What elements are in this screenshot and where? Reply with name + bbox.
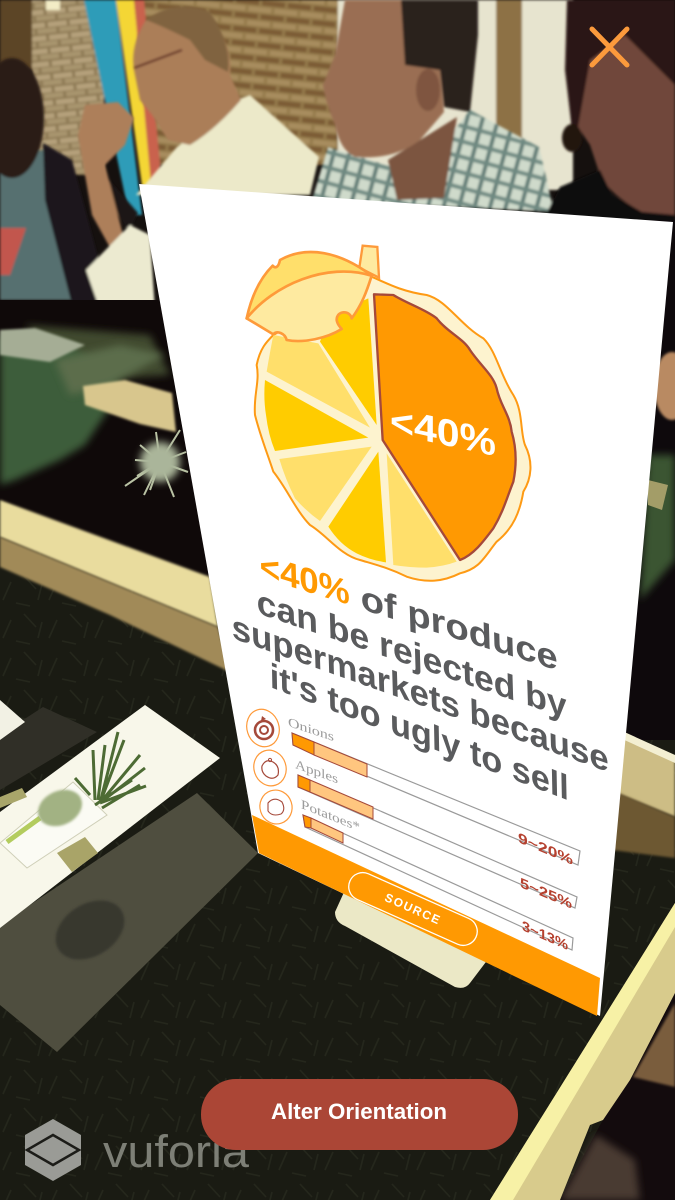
icon: potato <box>256 786 296 828</box>
row: potatoes: Potatoes* <box>301 796 360 835</box>
right side of the scene <box>600 220 675 858</box>
panel: tilted infographic card <box>139 184 673 1016</box>
row: onions: Onions <box>288 714 334 744</box>
row: apples: Apples <box>295 756 338 786</box>
icon: vuforia hexagon <box>25 1119 81 1181</box>
alter orientation button: Alter Orientation <box>271 1099 447 1124</box>
vuforia logo <box>25 1119 250 1181</box>
heading <box>231 546 609 808</box>
source button <box>344 868 482 950</box>
highlighted segment <box>374 294 516 560</box>
row: apples <box>295 756 577 913</box>
heading: can be rejected by <box>256 581 567 726</box>
heading: supermarkets because <box>231 606 609 780</box>
heading: of produce <box>360 578 558 678</box>
row: apples: 5~25% <box>520 875 572 913</box>
vuforia logo: vuforia <box>103 1126 250 1177</box>
heading: it's too ugly to sell <box>269 655 569 808</box>
orange footer band <box>252 815 600 1016</box>
alter orientation button <box>201 1079 518 1150</box>
heading: <40% <box>259 546 350 613</box>
stand under the card <box>335 890 495 988</box>
row: potatoes: 3~13% <box>522 919 568 954</box>
upper dark backdrop <box>0 0 675 335</box>
front leaf <box>247 272 372 341</box>
left plants and soil <box>0 300 230 672</box>
fruit stem <box>359 246 379 278</box>
row: potatoes <box>301 796 573 954</box>
bar chart: rejection rates <box>288 714 580 954</box>
icon: onion <box>242 705 284 751</box>
fruit label: <40% <box>390 399 496 465</box>
source button: SOURCE <box>383 890 443 928</box>
man in white shirt <box>136 95 319 195</box>
right timber planter <box>490 903 675 1200</box>
fruit segments <box>264 298 457 568</box>
man at left <box>0 150 73 300</box>
icon: apple <box>249 746 291 790</box>
row: onions: 9~20% <box>518 830 573 869</box>
seated guests <box>0 0 675 310</box>
chart: orange segmented fruit <box>247 246 530 581</box>
icon: close button <box>592 29 627 65</box>
brick walls, wall and hanging poles <box>0 0 573 215</box>
slate placemats and napkin <box>0 700 258 1052</box>
back leaf <box>247 252 372 318</box>
card background <box>139 184 673 1016</box>
woman at right <box>565 0 675 130</box>
man in plaid shirt <box>312 110 554 212</box>
row: onions <box>288 714 580 869</box>
fruit rind <box>255 277 530 581</box>
